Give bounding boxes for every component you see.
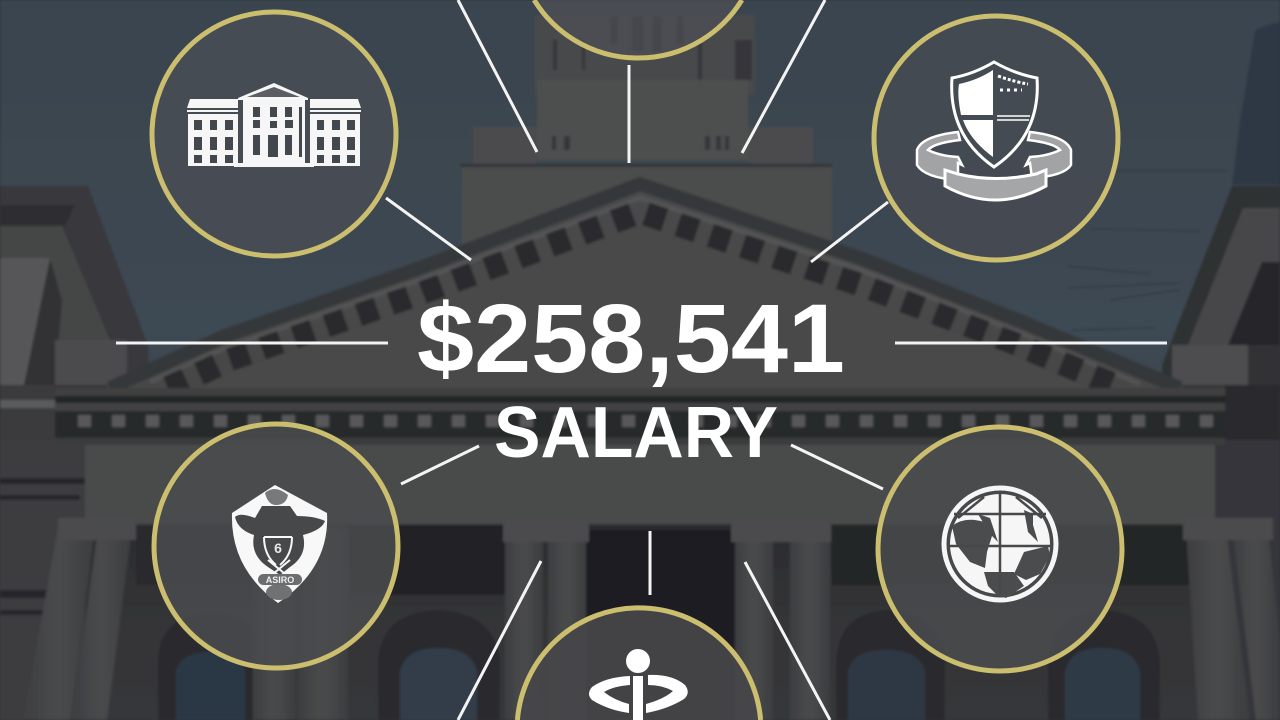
pediment rim	[110, 184, 1180, 388]
right wing	[1068, 22, 1280, 400]
headline value: $258,541	[417, 284, 845, 393]
icon: crest shield: ASIRO	[266, 575, 294, 585]
icon: figure emblem	[589, 649, 688, 720]
headline label: SALARY	[494, 393, 778, 473]
left wing	[0, 186, 150, 388]
badge: crest	[154, 424, 398, 668]
icon: crest shield	[232, 485, 327, 603]
door shadow	[586, 530, 736, 720]
windows with arches	[158, 610, 1160, 720]
icon: crest shield: 6	[274, 540, 282, 556]
pediment field	[100, 178, 1190, 390]
icon: globe	[944, 488, 1056, 600]
lower wall	[0, 385, 1280, 720]
tympanum fill over dentils bottom	[196, 226, 1098, 392]
column capitals	[58, 518, 1273, 542]
pediment dentils	[168, 212, 1122, 388]
columns	[23, 528, 1280, 720]
badge: top center	[534, 0, 742, 58]
entablature	[55, 388, 1225, 396]
badge: shield with ribbon	[874, 16, 1118, 260]
frieze	[85, 440, 1215, 524]
icon: government building	[187, 83, 361, 167]
badge: bottom center	[517, 608, 761, 720]
dome and drum	[460, 15, 832, 250]
badge: government building	[152, 12, 396, 256]
left end of cornice	[0, 385, 55, 440]
badge: globe	[878, 427, 1122, 671]
icon: shield with ribbon	[917, 62, 1071, 200]
